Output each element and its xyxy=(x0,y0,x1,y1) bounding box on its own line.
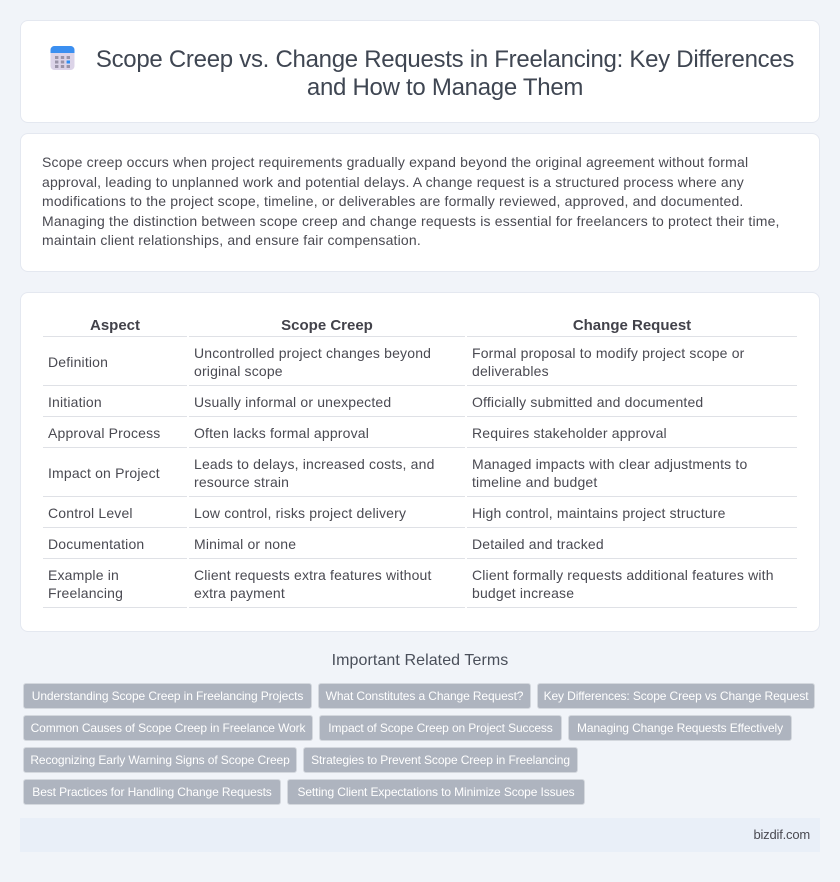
heading: Important Related Terms: Important Related Terms xyxy=(332,652,508,669)
row: Approval Process: Approval Process xyxy=(48,425,160,441)
tag: Common Causes of Scope Creep in Freelance Work xyxy=(31,721,305,735)
text block: summary: Scope creep occurs when project requirements gradually expand beyond the original agreement without formal xyxy=(42,154,748,170)
comparison table: Minimal or none xyxy=(194,536,296,552)
comparison table: High control, maintains project structure xyxy=(472,505,726,521)
comparison table: deliverables xyxy=(472,363,549,379)
row: Documentation: Documentation xyxy=(48,536,144,552)
text block: summary: Managing the distinction between scope creep and change requests is essential for freelancers to protect their time, xyxy=(42,212,780,228)
icon: calendar xyxy=(50,46,74,70)
tag xyxy=(319,715,562,741)
row: Example in Freelancing xyxy=(48,567,123,601)
footer text: bizdif.com: bizdif.com xyxy=(753,827,810,842)
comparison table: Client formally requests additional features with xyxy=(472,567,774,583)
panel: summary paragraph xyxy=(20,133,820,272)
comparison table: timeline and budget xyxy=(472,474,597,490)
comparison table: original scope xyxy=(194,363,283,379)
comparison table: Often lacks formal approval xyxy=(194,425,369,441)
comparison table: Low control, risks project delivery xyxy=(194,505,406,521)
header: Change Request: Change Request xyxy=(573,317,691,334)
tag xyxy=(23,715,313,741)
panel: title header xyxy=(20,20,820,123)
comparison table: Detailed and tracked xyxy=(472,536,604,552)
header: Aspect: Aspect xyxy=(90,317,140,334)
comparison table: Formal proposal to modify project scope or xyxy=(472,345,744,361)
comparison table: Officially submitted and documented xyxy=(472,394,703,410)
comparison table: Leads to delays, increased costs, and xyxy=(194,456,435,472)
header: Scope Creep: Scope Creep xyxy=(281,317,373,334)
tag: What Constitutes a Change Request? xyxy=(326,689,523,703)
tag xyxy=(287,779,585,805)
tag: Key Differences: Scope Creep vs Change Request xyxy=(544,689,808,703)
row: Example in Freelancing: Example in xyxy=(48,567,119,583)
row: Control Level: Control Level xyxy=(48,505,133,521)
tag: Recognizing Early Warning Signs of Scope Creep xyxy=(30,753,290,767)
comparison table: Managed impacts with clear adjustments to xyxy=(472,456,747,472)
comparison table: extra payment xyxy=(194,585,285,601)
tag: Understanding Scope Creep in Freelancing Projects xyxy=(32,689,303,703)
row: Initiation: Initiation xyxy=(48,394,102,410)
comparison table: Uncontrolled project changes beyond xyxy=(194,345,431,361)
tag list: related terms xyxy=(23,683,815,805)
tag: Managing Change Requests Effectively xyxy=(577,721,783,735)
tag xyxy=(303,747,578,773)
title xyxy=(96,46,794,101)
tag xyxy=(568,715,792,741)
row: Definition: Definition xyxy=(48,354,108,370)
tag xyxy=(23,683,312,709)
tag: Best Practices for Handling Change Requests xyxy=(32,785,272,799)
tag xyxy=(23,747,297,773)
footer bar xyxy=(20,818,820,852)
comparison table: budget increase xyxy=(472,585,574,601)
text block: summary xyxy=(42,154,780,248)
comparison table: Usually informal or unexpected xyxy=(194,394,391,410)
title: and How to Manage Them xyxy=(307,74,583,101)
tag: Setting Client Expectations to Minimize Scope Issues xyxy=(297,785,575,799)
comparison table: Requires stakeholder approval xyxy=(472,425,667,441)
comparison table: Client requests extra features without xyxy=(194,567,432,583)
row: Impact on Project: Impact on Project xyxy=(48,465,160,481)
row: Example in Freelancing: Freelancing xyxy=(48,585,123,601)
tag xyxy=(318,683,531,709)
text block: summary: maintain client relationships, and ensure fair compensation. xyxy=(42,232,421,248)
text block: summary: modifications to the project scope, timeline, or deliverables are formally reviewed, approved, and documented. xyxy=(42,193,744,209)
panel: comparison table xyxy=(20,292,820,632)
comparison table xyxy=(43,317,797,608)
tag xyxy=(537,683,815,709)
tag: Impact of Scope Creep on Project Success xyxy=(328,721,553,735)
tag: Strategies to Prevent Scope Creep in Freelancing xyxy=(311,753,570,767)
title: Scope Creep vs. Change Requests in Freelancing: Key Differences xyxy=(96,46,794,73)
text block: summary: approval, leading to unplanned work and potential delays. A change request is a structured process where any xyxy=(42,174,744,190)
tag xyxy=(23,779,281,805)
comparison table: resource strain xyxy=(194,474,289,490)
